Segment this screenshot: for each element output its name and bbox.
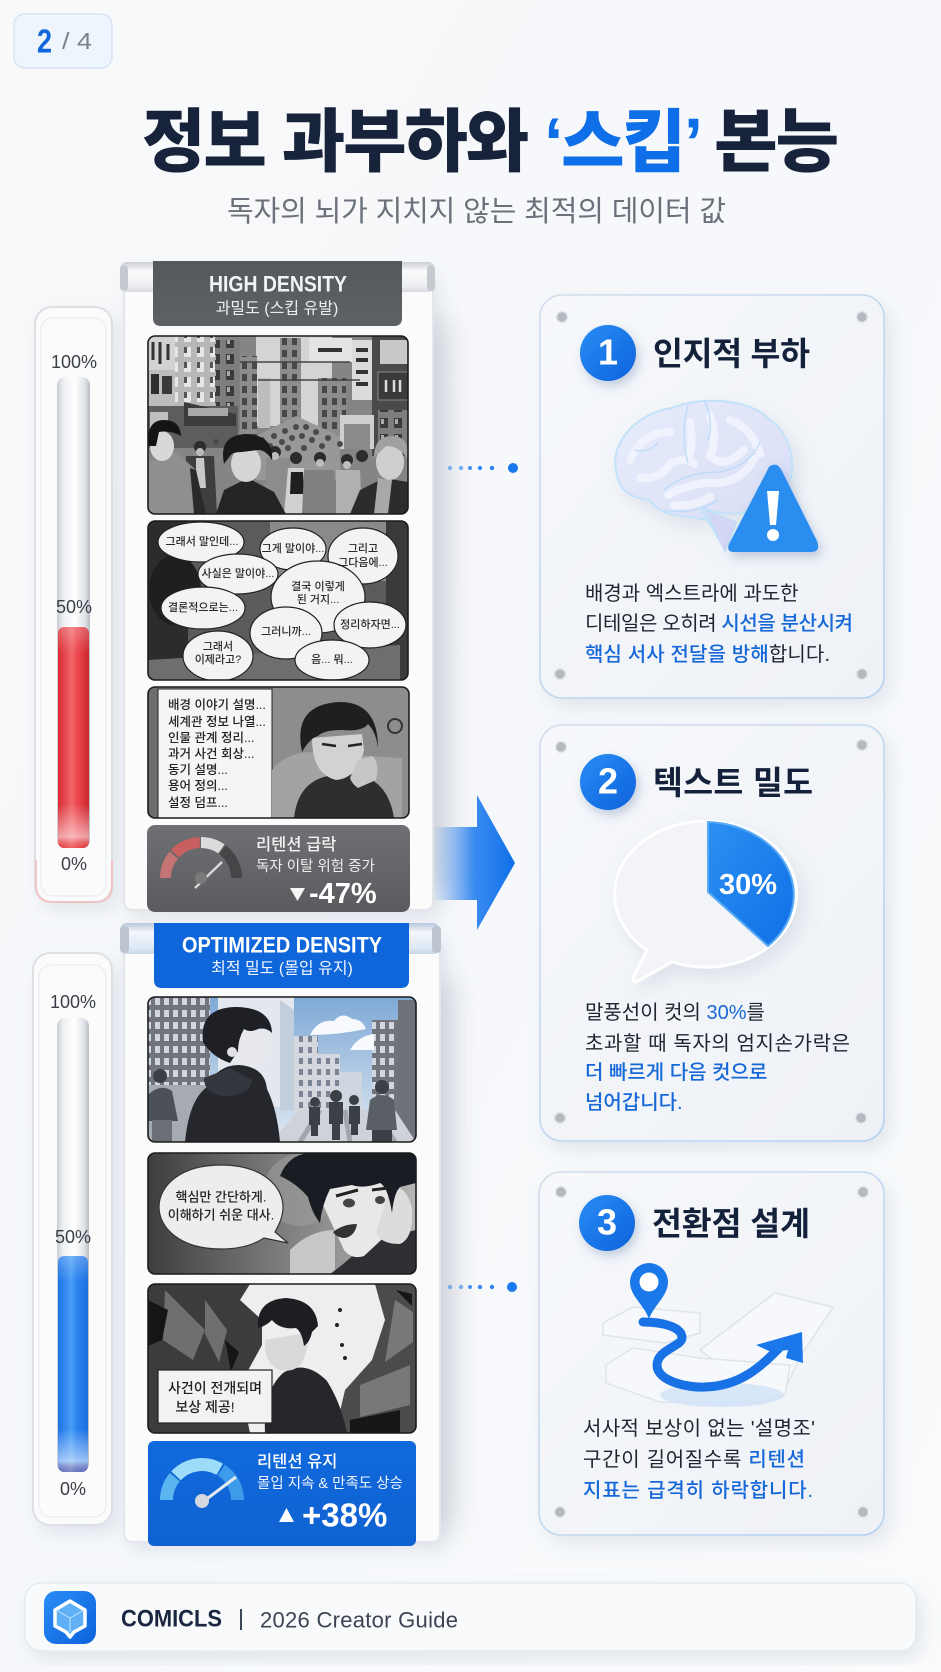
comic: narration overload — [148, 687, 409, 818]
icon: glass brain with warning — [615, 400, 818, 552]
gauge tube: high density — [35, 307, 112, 902]
bubble text: 이해하기 쉬운 대사. — [168, 1208, 274, 1222]
screws — [554, 1186, 868, 1518]
bubble lines: 그래서 말인데... — [166, 534, 238, 548]
caption box — [158, 1370, 272, 1423]
header title: HIGH DENSITY — [209, 272, 347, 296]
bubble lines: 그게 말이야... — [262, 541, 324, 555]
number badge — [580, 325, 636, 381]
character — [258, 1298, 347, 1433]
stat title: 리텐션 유지 — [257, 1452, 337, 1471]
sky — [256, 336, 332, 426]
panel: optimized density — [120, 923, 441, 1546]
left storefront — [148, 406, 238, 448]
right character — [350, 478, 408, 514]
warning triangle — [728, 465, 818, 552]
narration lines: 세계관 정보 나열... — [168, 715, 266, 729]
card text: 서사적 보상이 없는 '설명조' — [583, 1417, 815, 1440]
narration lines: 용어 정의... — [168, 779, 228, 793]
panel: high density — [120, 261, 435, 912]
caption text: 사건이 전개되며 — [168, 1380, 262, 1396]
card 3: pivot design — [539, 1172, 884, 1535]
caption text — [168, 1380, 262, 1415]
brand name: COMICLS — [121, 1606, 222, 1632]
screws — [554, 312, 868, 680]
glass sheet — [124, 930, 440, 1542]
speedometer icon — [166, 842, 237, 888]
frame — [148, 1284, 416, 1433]
bubble text — [168, 1190, 274, 1222]
inner tube — [57, 1018, 89, 1472]
blue route arrow — [643, 1322, 783, 1387]
number badge — [580, 754, 636, 810]
narration lines: 동기 설명... — [168, 763, 228, 777]
blue fill level — [58, 1256, 88, 1472]
icon: route on glass blocks — [603, 1263, 833, 1407]
left buildings — [148, 336, 175, 370]
number badge — [579, 1195, 635, 1251]
narration lines: 설정 덤프... — [168, 796, 228, 810]
comic: event payoff — [148, 1284, 416, 1433]
card text: 지표는 급격히 하락합니다. — [583, 1479, 813, 1502]
narration lines: 배경 이야기 설명... — [168, 698, 266, 712]
tired character — [294, 702, 402, 818]
caption text: 보상 제공! — [175, 1399, 235, 1415]
comic: concise dialogue — [148, 1153, 416, 1274]
page total: / 4 — [62, 28, 92, 54]
bubble lines: 사실은 말이야... — [202, 566, 274, 580]
shadow of left panels — [420, 320, 455, 1530]
passers-by — [148, 1069, 397, 1142]
card heading: 텍스트 밀도 — [653, 765, 813, 801]
inner tube — [57, 377, 90, 848]
scale 50%: 50% — [56, 597, 92, 617]
scale 0%: 0% — [61, 854, 87, 874]
location pin — [630, 1263, 668, 1319]
page badge — [14, 14, 112, 68]
card text: 초과할 때 독자의 엄지손가락은 — [585, 1032, 850, 1055]
card text: 핵심 서사 전달을 방해합니다. — [585, 643, 830, 666]
bubble lines: 그래서 — [203, 640, 233, 653]
narration lines: 과거 사건 회상... — [168, 747, 254, 761]
screws — [554, 740, 868, 1124]
card 1: cognitive load — [540, 295, 884, 698]
header subtitle: 최적 밀도 (몰입 유지) — [211, 960, 353, 978]
comic: too many speech bubbles — [148, 521, 408, 681]
card heading: 인지적 부하 — [653, 336, 810, 372]
number badge: 1 — [598, 332, 618, 372]
centre character — [216, 478, 286, 514]
street wires — [240, 362, 360, 380]
crowd — [256, 416, 340, 480]
scale 50%: 50% — [55, 1227, 91, 1247]
gauge tube: optimized — [33, 953, 112, 1525]
page number: 2 — [37, 22, 52, 60]
signs and right buildings — [309, 338, 352, 362]
scale 0%: 0% — [60, 1479, 86, 1499]
footer divider — [240, 1609, 242, 1630]
card text: 말풍선이 컷의 30%를 — [585, 1001, 765, 1024]
header title: OPTIMIZED DENSITY — [182, 932, 382, 958]
bubble lines: 음... 뭐... — [311, 653, 353, 666]
arrow: high density to findings — [433, 795, 515, 930]
retention card: keep — [148, 1441, 416, 1546]
narration lines: 인물 관계 정리... — [168, 731, 254, 745]
scale 100%: 100% — [50, 992, 96, 1012]
narration lines — [168, 698, 266, 810]
number badge: 3 — [597, 1202, 617, 1242]
footer guide text: 2026 Creator Guide — [260, 1608, 458, 1632]
frame — [148, 521, 408, 680]
comic: clear street — [148, 997, 416, 1142]
card text — [583, 1417, 815, 1502]
blue 30 percent slice — [708, 822, 794, 946]
subtitle: 독자의 뇌가 지치지 않는 최적의 데이터 값 — [227, 195, 726, 228]
left character — [149, 452, 196, 514]
bubble lines: 된 거지... — [297, 593, 339, 606]
card text: 디테일은 오히려 시선을 분산시켜 — [585, 612, 853, 635]
slice label: 30% — [719, 869, 777, 901]
speedometer icon — [166, 1465, 238, 1508]
number badge: 2 — [598, 760, 618, 802]
glass sheet — [124, 268, 433, 910]
bubble lines: 결론적으로는... — [168, 601, 238, 614]
red fill level — [58, 627, 89, 848]
header label — [154, 923, 409, 988]
stat description: 독자 이탈 위험 증가 — [256, 858, 375, 875]
connector dots: first — [448, 463, 518, 473]
roller rod — [120, 923, 441, 954]
logo icon — [44, 1591, 96, 1644]
card text: 넘어갑니다. — [585, 1091, 683, 1114]
connector dots: second — [448, 1282, 517, 1292]
stat value: -47% — [309, 878, 377, 910]
bubble text: 핵심만 간단하게. — [176, 1190, 266, 1204]
stat title: 리텐션 급락 — [256, 835, 336, 854]
card heading: 전환점 설계 — [652, 1206, 810, 1242]
bubble lines — [166, 534, 400, 666]
frame — [148, 687, 409, 818]
bubble lines: 그러니까... — [261, 625, 311, 638]
stat description: 몰입 지속 & 만족도 상승 — [257, 1475, 403, 1492]
frame — [148, 1153, 416, 1274]
card text: 구간이 길어질수록 리텐션 — [583, 1448, 805, 1471]
retention card: drop — [147, 825, 410, 912]
bubbles — [158, 522, 406, 681]
walkers — [266, 458, 290, 480]
card text: 배경과 엑스트라에 과도한 — [585, 582, 799, 605]
roller rod — [120, 262, 435, 292]
speech bubble — [159, 1165, 288, 1249]
rock walls — [148, 1284, 262, 1433]
frame — [148, 997, 416, 1142]
glass base — [603, 1293, 833, 1402]
bubble lines: 그리고 — [348, 542, 378, 555]
footer bar — [25, 1583, 916, 1651]
title: 정보 과부하와 ‘스킵’ 본능 — [142, 104, 839, 180]
scale 100%: 100% — [51, 352, 97, 372]
header subtitle: 과밀도 (스킵 유발) — [216, 300, 338, 318]
main character back view — [185, 1007, 280, 1142]
bubble lines: 정리하자면... — [340, 618, 400, 631]
bubble lines: 결국 이렇게 — [291, 579, 345, 593]
bubble lines: 그다음에... — [338, 556, 388, 569]
stat value: +38% — [302, 1496, 387, 1534]
header label — [153, 261, 402, 326]
close-up character — [280, 1153, 416, 1274]
icon: speech bubble pie — [615, 821, 797, 982]
comic: crowded street — [148, 336, 408, 514]
card text: 더 빠르게 다음 컷으로 — [585, 1061, 767, 1084]
card text — [585, 582, 853, 666]
card 2: text density — [540, 725, 884, 1141]
card text — [585, 1001, 850, 1114]
frame — [148, 336, 408, 514]
bubble lines: 이제라고? — [195, 653, 241, 666]
tower — [280, 338, 301, 430]
